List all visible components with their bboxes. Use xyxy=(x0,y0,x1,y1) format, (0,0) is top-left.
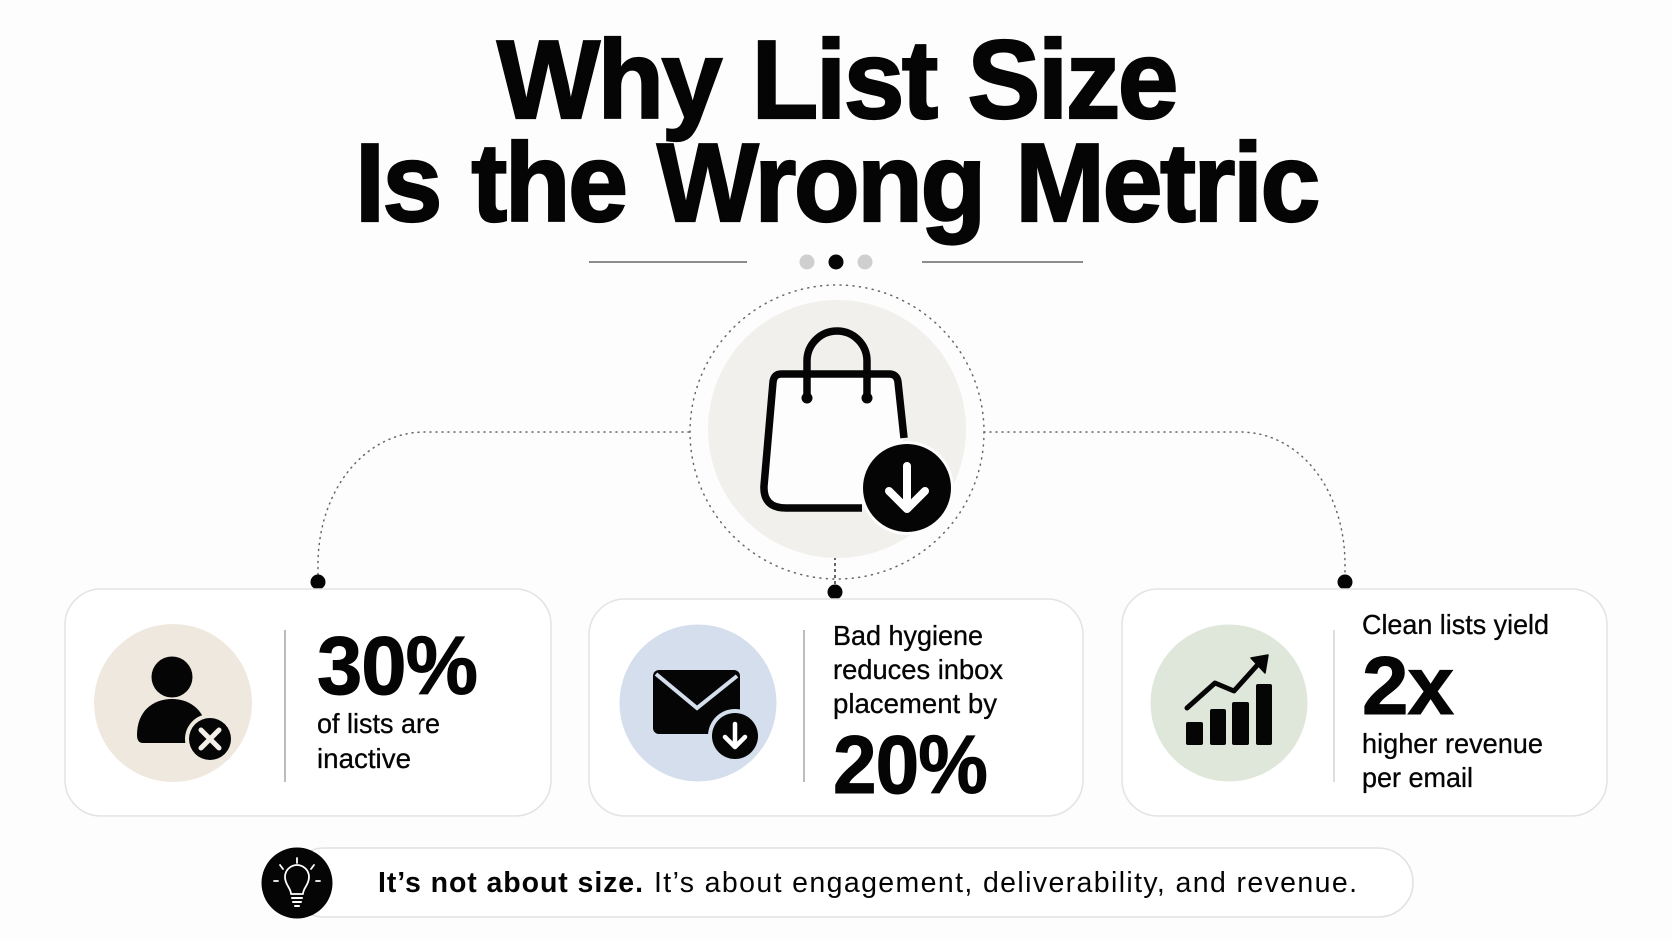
description: clean lists: Clean lists yield xyxy=(1362,609,1549,640)
icon: light bulb xyxy=(262,848,332,918)
callout text: It’s not about size. xyxy=(378,867,643,899)
connector: centre xyxy=(828,557,842,600)
description: inbox placement xyxy=(833,620,1003,719)
description: higher revenue: higher revenue xyxy=(1362,728,1543,759)
title: Why List Size xyxy=(497,18,1176,142)
description: inbox placement: placement by xyxy=(833,688,997,719)
stat: 30%: 30% xyxy=(317,619,477,712)
panel: inbox placement xyxy=(589,599,1083,816)
title: Is the Wrong Metric xyxy=(355,121,1318,245)
stat: 20%: 20% xyxy=(833,718,987,811)
description: higher revenue: per email xyxy=(1362,762,1473,793)
title xyxy=(355,18,1318,245)
description: inbox placement: reduces inbox xyxy=(833,654,1003,685)
panel: clean lists revenue xyxy=(1122,589,1607,816)
description: inactive lists xyxy=(317,708,440,774)
description: inactive lists: inactive xyxy=(317,743,411,774)
description: inbox placement: Bad hygiene xyxy=(833,620,983,651)
connector: left xyxy=(310,432,689,590)
description: higher revenue xyxy=(1362,728,1543,793)
icon: envelope with download xyxy=(620,624,776,782)
central icon: shopping bag with download badge xyxy=(690,285,984,579)
title divider with dots xyxy=(589,254,1083,270)
callout: takeaway bar xyxy=(262,848,1413,918)
description: inactive lists: of lists are xyxy=(317,708,440,739)
callout text: It’s about engagement, deliverability, and revenue. xyxy=(654,867,1357,899)
panel: inactive lists xyxy=(65,589,551,816)
icon: growth chart xyxy=(1150,624,1308,782)
icon: user with x xyxy=(94,624,252,782)
connector: right xyxy=(984,432,1352,590)
stat: 2x: 2x xyxy=(1362,639,1454,732)
